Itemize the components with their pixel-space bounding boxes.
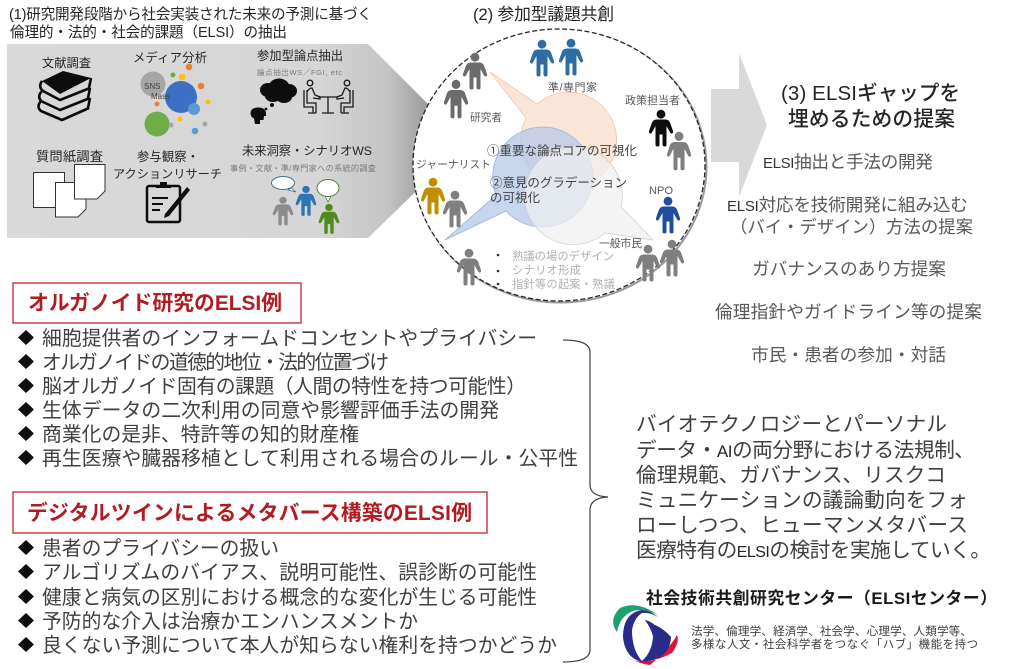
list: digital twin ELSI: 予防的な介入は治療かエンハンスメントか [42,611,418,633]
text: gradation of opinions: ②意見のグラデーション [490,175,627,190]
text: gradation of opinions [490,175,627,205]
logo: ELSI center [613,605,678,665]
arrow: to proposals [711,53,767,197]
heading: section 3: 埋めるための提案 [788,108,955,131]
icon: clipboard [147,182,190,222]
list: proposals: 倫理指針やガイドライン等の提案 [715,302,982,322]
text: gradation of opinions: の可視化 [490,191,540,205]
people: experts [530,39,583,76]
people: journalists [421,178,467,228]
icon: books [38,71,91,120]
list: deliberation bullets [497,249,615,291]
speech bubble: grey [524,147,653,245]
label: policy makers: 政策担当者 [625,93,680,107]
label: workshop note: 論点抽出WS／FGI, etc [257,67,342,77]
heading: section 1 [9,6,372,41]
list: deliberation bullets: シナリオ形成 [512,264,581,277]
label: participant observation: アクションリサーチ [113,167,222,181]
label: NPO: NPO [649,185,673,197]
list: deliberation bullets: 熟議の場のデザイン [512,249,614,263]
bracket [563,340,608,662]
text block: summary: 倫理規範、ガバナンス、リスクコ [636,464,946,487]
label: foresight note: 事例・文献・準/専門家への系統的調査 [230,163,376,173]
person: NPO [656,197,680,234]
list: digital twin ELSI: 良くない予測について本人が知らない権利を持つかどうか [42,635,557,657]
heading: section 1: (1)研究開発段階から社会実装された未来の予測に基づく [9,6,372,23]
panel: participatory agenda circle [413,29,706,302]
speech bubble: blue [445,127,593,240]
text block: summary: バイオテクノロジーとパーソナル [636,413,947,436]
heading: section 3 [781,82,960,131]
label: foresight scenario workshop: 未来洞察・シナリオWS [242,144,372,158]
list: proposals: ガバナンスのあり方提案 [752,259,946,279]
list: proposals: ELSI抽出と手法の開発 [763,152,933,172]
heading: ELSI center: 社会技術共創研究センター（ELSIセンター） [646,589,997,608]
list: organoid ELSI: 再生医療や臓器移植として利用される場合のルール・公平性 [42,448,578,470]
chart: media bubbles: Mass [151,92,170,101]
list: proposals [715,152,982,365]
text: core issues: ①重要な論点コアの可視化 [487,143,637,158]
callout: digital twin heading [13,492,487,533]
icon: workshop people [272,176,339,234]
list: deliberation bullets: 指針等の起案・熟議 [512,277,615,291]
label: literature survey: 文献調査 [42,56,91,70]
people: policy makers [649,110,691,170]
chart: media bubbles [140,64,210,137]
icon: thinking head [250,78,297,124]
label: participant observation: 参与観察・ [137,150,199,164]
heading: section 2: (2) 参加型議題共創 [473,5,614,24]
label: journalists: ジャーナリスト [416,159,491,171]
text: center description [691,624,978,651]
label: media analysis: メディア分析 [133,50,207,65]
text: center description: 法学、倫理学、経済学、社会学、心理学、人類学等、 [691,624,972,638]
people: researchers [444,53,487,118]
list: organoid ELSI: オルガノイドの道徳的地位・法的位置づけ [42,352,389,374]
speech bubble: orange [490,72,617,188]
list: digital twin ELSI: 健康と病気の区別における概念的な変化が生じる可能性 [42,587,537,609]
list: organoid ELSI [18,328,578,470]
list: digital twin ELSI: アルゴリズムのバイアス、説明可能性、誤診断の可能性 [42,562,537,584]
list: organoid ELSI: 生体データの二次利用の同意や影響評価手法の開発 [42,400,499,422]
callout: organoid heading: オルガノイド研究のELSI例 [28,292,282,315]
list: proposals: 市民・患者の参加・対話 [751,345,946,365]
text: center description: 多様な人文・社会科学者をつなぐ「ハブ」機能を持つ [691,637,978,651]
label: experts: 準/専門家 [548,80,597,94]
people: citizens [636,240,684,282]
icon: paper sheets [34,164,105,217]
text block: summary: 医療特有のELSIの検討を実施していく。 [636,539,991,562]
list: proposals: （バイ・デザイン）方法の提案 [730,217,973,237]
text block: summary: データ・AIの両分野における法規制、 [636,439,975,462]
callout: organoid heading [13,283,301,323]
label: questionnaire: 質問紙調査 [36,149,103,164]
list: digital twin ELSI [18,538,557,657]
label: participatory issue extraction: 参加型論点抽出 [257,48,343,63]
text block: summary: ミュニケーションの議論動向をフォ [636,489,968,512]
label: researchers: 研究者 [470,111,502,124]
callout: digital twin heading: デジタルツインによるメタバース構築のELSI例 [27,501,472,525]
label: citizens: 一般市民 [599,237,642,250]
list: digital twin ELSI: 患者のプライバシーの扱い [42,538,279,560]
text block: summary: ローしつつ、ヒューマンメタバース [636,514,968,537]
list: proposals: ELSI対応を技術開発に組み込む [727,195,968,215]
list: organoid ELSI: 商業化の是非、特許等の知的財産権 [42,424,359,446]
heading: section 3: (3) ELSIギャップを [781,82,960,105]
heading: section 1: 倫理的・法的・社会的課題（ELSI）の抽出 [10,24,287,41]
chart: media bubbles: SNS [144,82,160,91]
list: organoid ELSI: 細胞提供者のインフォームドコンセントやプライバシー [42,328,537,350]
person: bottom citizen [457,249,481,286]
panel: ELSI extraction methods [7,44,440,238]
text block: summary [636,413,991,562]
icon: interview table [304,80,353,113]
label: participant observation [113,150,222,181]
list: organoid ELSI: 脳オルガノイド固有の課題（人間の特性を持つ可能性） [42,376,526,398]
